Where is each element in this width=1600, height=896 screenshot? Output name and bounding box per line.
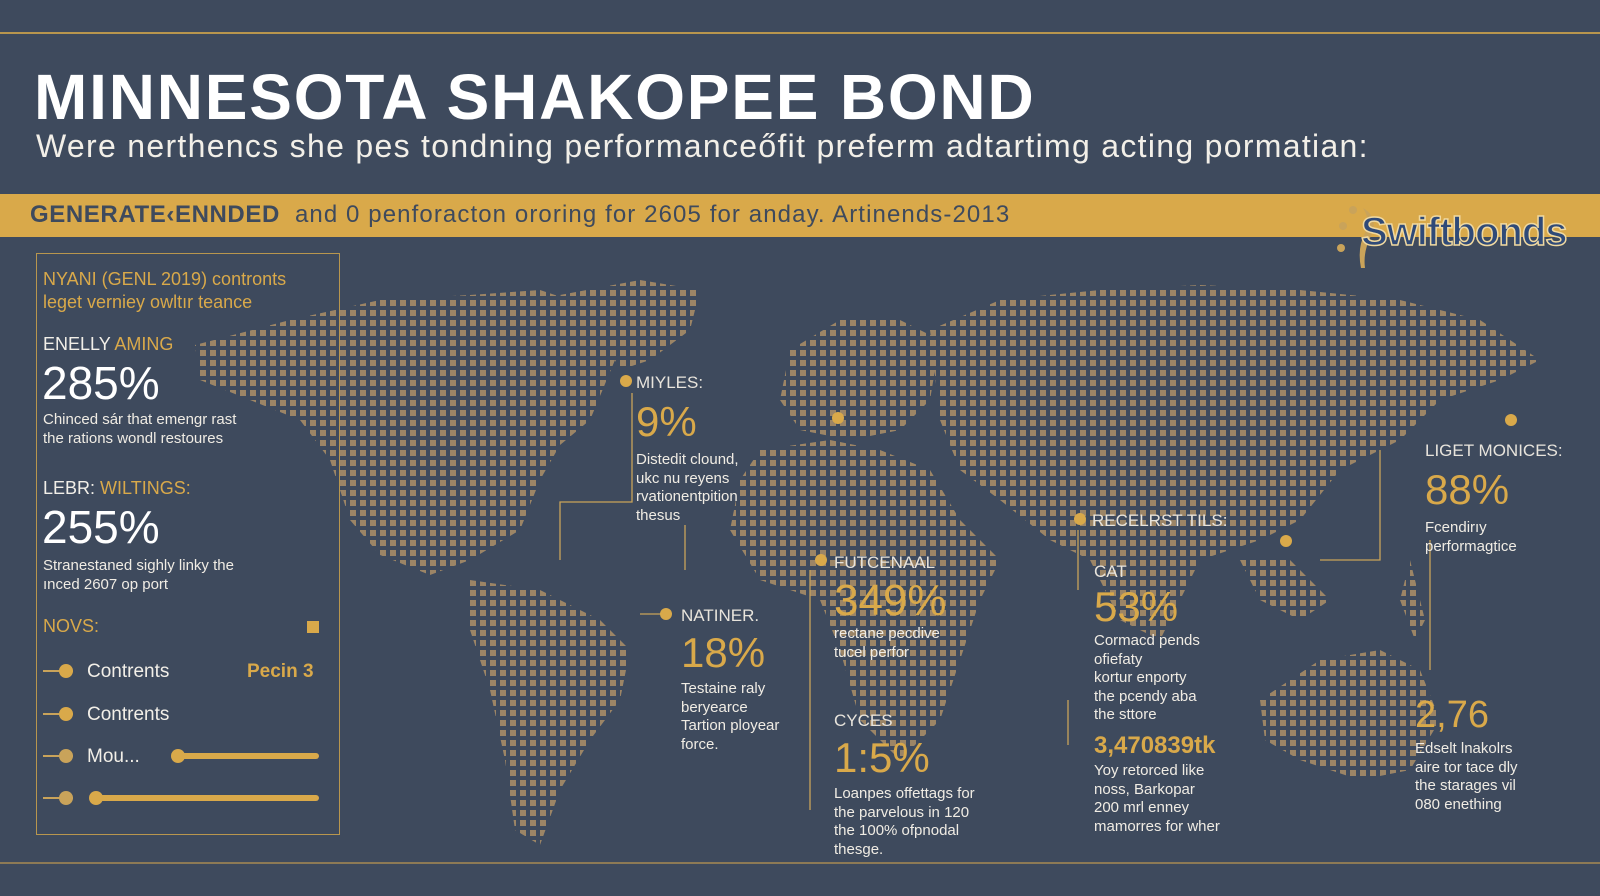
callout: FUTCENAAL: rectane pecdive: [834, 625, 940, 642]
callout: CAT: the sttore: [1094, 706, 1157, 723]
callout: 2,76: aire tor tace dly: [1415, 758, 1518, 776]
callout: CAT: kortur enporty: [1094, 669, 1187, 686]
callout: CYCES: thesge.: [834, 840, 883, 858]
callout: 2,76: [1415, 694, 1518, 812]
callout: CAT: Cormacd pends: [1094, 632, 1200, 649]
callout: LIGET MONICES: Fcendirıy: [1425, 519, 1487, 536]
left panel: Contrents: [87, 661, 169, 682]
callout: 3,470839tk: [1094, 732, 1220, 834]
callout: MIYLES: thesus: [636, 506, 680, 524]
callout: FUTCENAAL: tucel perfor: [834, 644, 909, 660]
left panel: Pecin 3: [247, 661, 314, 682]
callout: LIGET MONICES: 88%: [1425, 466, 1509, 513]
callout: NATINER: Testaine raly: [681, 680, 765, 697]
callout: NATINER: force.: [681, 736, 719, 752]
callout: 3,470839tk: Yoy retorced like: [1094, 762, 1204, 779]
callout: CYCES: the 100% ofpnodal: [834, 822, 959, 839]
callout: 3,470839tk: mamorres for wher: [1094, 818, 1220, 834]
callout: 2,76: Edselt lnakolrs: [1415, 740, 1513, 757]
callout: FUTCENAAL: 349%: [834, 576, 947, 625]
callout: MIYLES: ukc nu reyens: [636, 470, 729, 486]
left panel: NYANI (GENL 2019) contronts: [43, 269, 286, 289]
callout: CYCES: Loanpes offettags for: [834, 785, 975, 802]
callout: CAT: ofiefaty: [1094, 650, 1142, 668]
callout: CAT: 53%: [1094, 583, 1178, 630]
left panel: Stranestaned sighly linky the: [43, 557, 234, 574]
banner: GENERATE‹ENNDED and 0 penforacton ororing for 2605 for anday. Artinends-2013: [30, 201, 1010, 228]
callout: 2,76: the starages vil: [1415, 777, 1516, 794]
callout: NATINER: 18%: [681, 629, 765, 676]
left panel: NOVS:: [43, 616, 99, 636]
callout: CYCES: [834, 711, 975, 858]
callout: NATINER: beryearce: [681, 698, 748, 716]
left panel: the rations wondl restoures: [43, 430, 223, 446]
callout: CAT: CAT: [1094, 562, 1127, 581]
left panel: 285%: [42, 357, 160, 409]
callout: FUTCENAAL: FUTCENAAL: [834, 553, 935, 572]
callout: 3,470839tk: noss, Barkopar: [1094, 780, 1195, 798]
left panel: [36, 253, 340, 835]
callout: 2,76: 2,76: [1415, 694, 1489, 736]
left panel: Mou...: [87, 746, 140, 767]
title: MINNESOTA SHAKOPEE BOND: [34, 61, 1035, 133]
callout: RECELRST TILS: RECELRST TILS:: [1092, 511, 1227, 530]
callout: CYCES: CYCES: [834, 711, 893, 730]
callout: NATINER: Tartion ployear: [681, 717, 779, 734]
slider rows: [43, 670, 73, 672]
callout: CYCES: 1:5%: [834, 734, 930, 781]
logo: Swiftbonds: Swiftbonds: [1361, 210, 1567, 254]
callout: 3,470839tk: 200 mrl enney: [1094, 799, 1189, 816]
callout: CYCES: the parvelous in 120: [834, 804, 969, 820]
callout: CAT: the pcendy aba: [1094, 688, 1197, 704]
callout: MIYLES: rvationentpition: [636, 488, 738, 505]
callout: LIGET MONICES: performagtice: [1425, 538, 1517, 554]
subtitle: Were nerthencs she pes tondning performanceőfit preferm adtartimg acting pormatian:: [36, 128, 1369, 164]
callout: LIGET MONICES: LIGET MONICES:: [1425, 441, 1563, 460]
left panel: ınced 2607 op port: [43, 576, 168, 592]
banner: [0, 194, 1600, 237]
callout: MIYLES: 9%: [636, 398, 697, 445]
left panel: LEBR: WILTINGS:: [43, 478, 191, 498]
left panel: Contrents: [87, 704, 169, 725]
callout: NATINER: [681, 606, 780, 752]
callout: MIYLES: [636, 373, 739, 524]
callout: MIYLES: MIYLES:: [636, 373, 703, 392]
left panel: 255%: [42, 501, 160, 553]
callout: 2,76: 080 enething: [1415, 796, 1502, 812]
callout: FUTCENAAL: [834, 553, 947, 660]
left panel: leget verniey owltır teance: [43, 292, 252, 312]
callout: 3,470839tk: 3,470839tk: [1094, 732, 1215, 759]
left panel: Chinced sár that emengr rast: [43, 411, 236, 428]
logo: Swiftbonds: [1337, 206, 1567, 268]
callout: CAT: [1094, 562, 1200, 723]
left panel: ENELLY AMING: [43, 334, 173, 354]
callout: MIYLES: Distedit clound,: [636, 451, 739, 468]
callout: NATINER: NATINER.: [681, 606, 759, 625]
callout: LIGET MONICES: [1425, 441, 1563, 554]
callout dots: [620, 375, 632, 387]
